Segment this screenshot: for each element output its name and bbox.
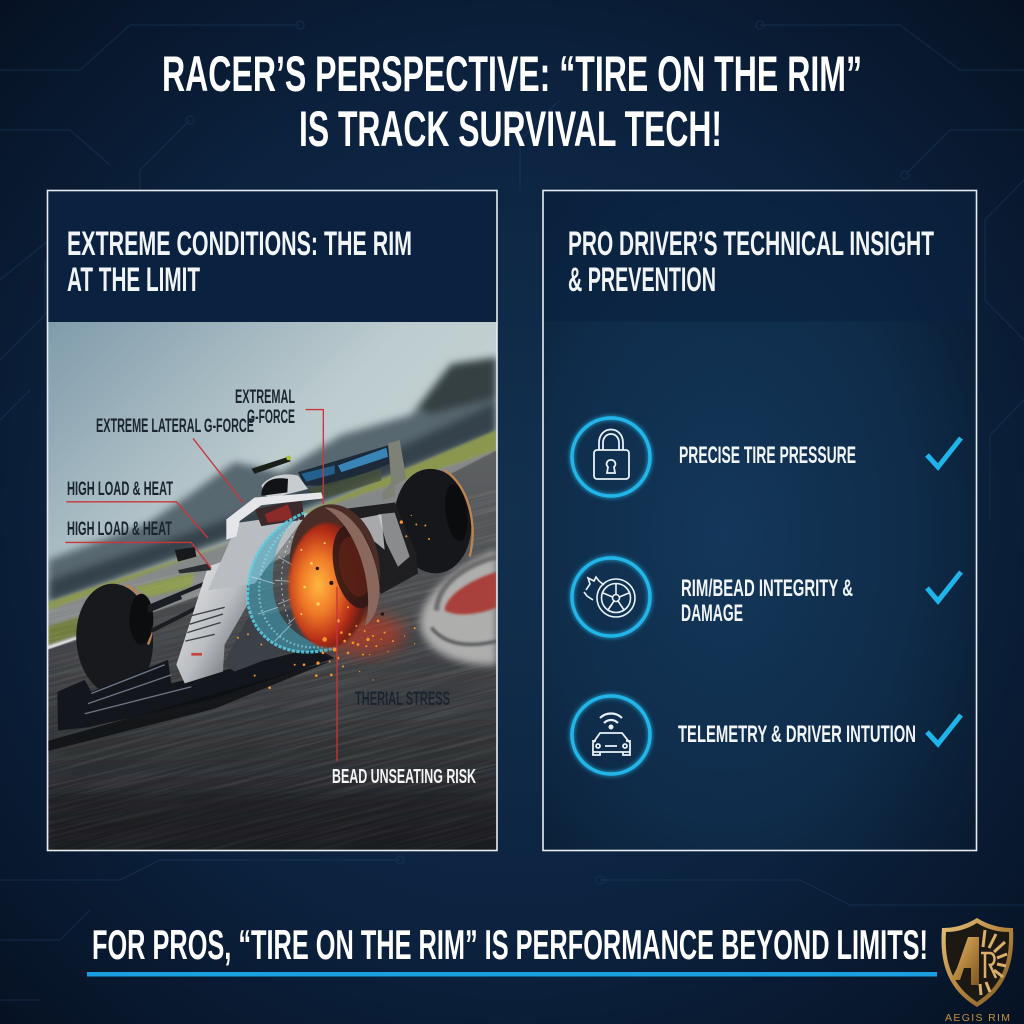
- panel heading: technical insight: [568, 225, 934, 299]
- race car photo illustration: [48, 322, 496, 850]
- label: PRECISE TIRE PRESSURE: [679, 442, 856, 469]
- photo callout labels: HIGH LOAD & HEAT: [67, 519, 172, 540]
- icon: connected car: [572, 696, 650, 774]
- photo callout labels: THERIAL STRESS: [355, 689, 450, 710]
- title: [162, 46, 862, 157]
- label: RIM/BEAD INTEGRITY &: [681, 575, 853, 602]
- nose and chassis: [175, 547, 315, 683]
- icon: damaged wheel: [572, 558, 650, 636]
- logo: aegis rim: [941, 918, 1013, 1024]
- rear wing: [298, 440, 406, 501]
- check mark: [927, 438, 961, 467]
- check mark: [927, 715, 961, 744]
- photo callout labels: G-FORCE: [247, 407, 295, 428]
- front wing: [48, 648, 335, 751]
- panel: extreme conditions: [46, 190, 498, 852]
- label: DAMAGE: [681, 600, 743, 627]
- photo callout labels: HIGH LOAD & HEAT: [67, 479, 173, 500]
- check mark: [927, 572, 961, 601]
- sparks: [237, 515, 430, 689]
- panel heading: extreme conditions: EXTREME CONDITIONS: THE RIM: [67, 225, 412, 263]
- label: [681, 575, 853, 627]
- photo callout labels: [67, 387, 476, 788]
- car: [48, 440, 477, 751]
- rear wheel: [396, 468, 474, 574]
- red callout lines: [65, 410, 337, 761]
- cockpit and halo: [208, 456, 323, 590]
- item: tire pressure: [572, 418, 961, 496]
- item: rim and bead integrity: [572, 558, 961, 636]
- item: telemetry and intuition: [572, 696, 961, 774]
- wordmark: AEGIS RIM: [945, 1012, 1010, 1024]
- front suspension: [148, 584, 205, 631]
- kerb: [420, 550, 497, 665]
- panel heading: extreme conditions: AT THE LIMIT: [67, 261, 200, 299]
- panel heading: technical insight: & PREVENTION: [568, 261, 716, 299]
- photo callout labels: EXTREME LATERAL G-FORCE: [96, 416, 254, 437]
- shield: [941, 918, 1013, 1007]
- title: IS TRACK SURVIVAL TECH!: [299, 101, 722, 157]
- front wheel: [76, 584, 154, 688]
- panel: technical insight: [543, 190, 976, 850]
- panel heading: extreme conditions: [67, 225, 412, 299]
- icon: padlock: [572, 418, 650, 496]
- engine and rear suspension: [341, 503, 418, 594]
- photo callout labels: BEAD UNSEATING RISK: [332, 766, 476, 788]
- overheating wheel: [248, 500, 405, 655]
- photo callout labels: EXTREMAL: [235, 387, 295, 408]
